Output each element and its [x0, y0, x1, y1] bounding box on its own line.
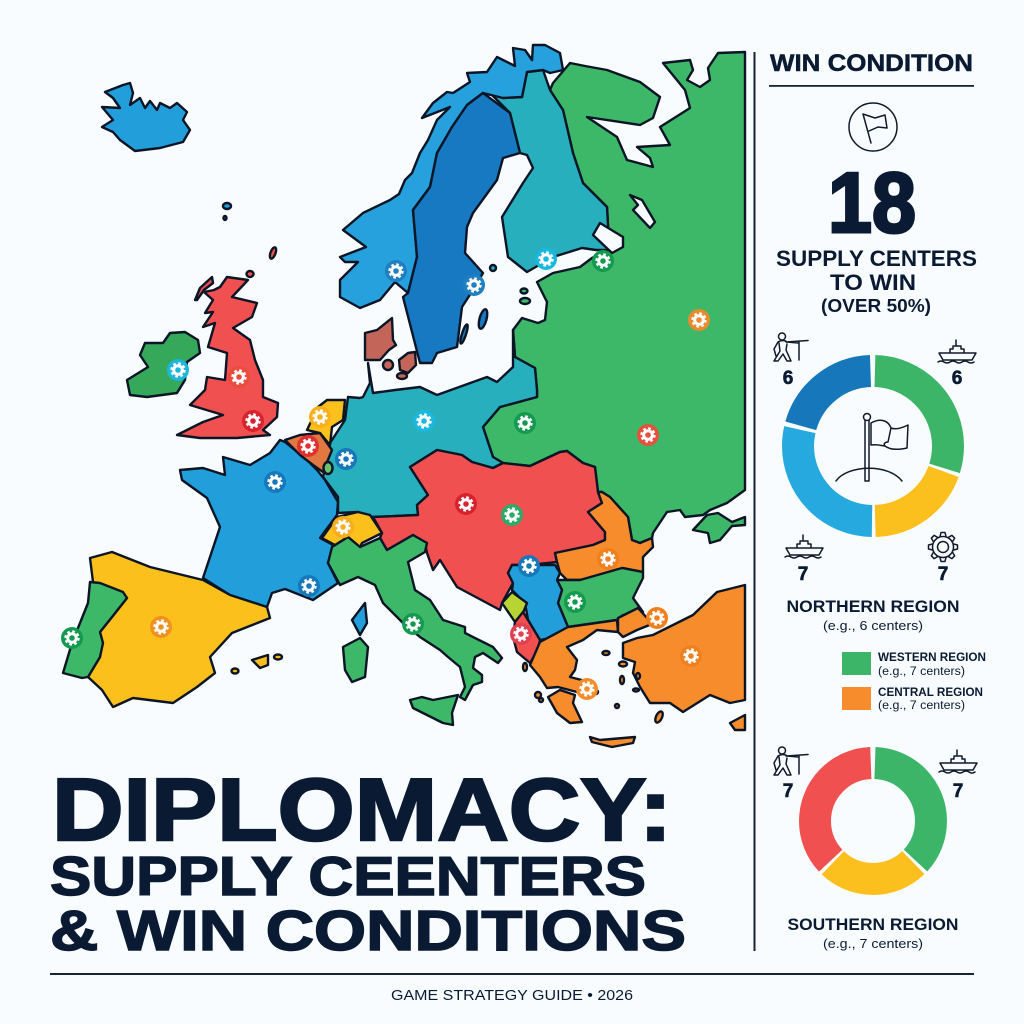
win condition text — [776, 246, 977, 316]
region: Luxembourg — [324, 462, 332, 474]
legend swatch: central — [842, 687, 871, 710]
region: Germany and Baltic coast — [323, 330, 537, 517]
legend text: western: (e.g., 7 centers) — [878, 666, 965, 678]
supply center marker: Finland — [535, 248, 557, 270]
region: European Turkey — [618, 608, 657, 637]
icon: flag in circle — [849, 103, 897, 151]
region: Montenegro — [502, 592, 527, 622]
supply center marker: Portugal — [61, 627, 83, 649]
donut values: southern region: 7 — [953, 781, 963, 802]
region: Aegean islands — [523, 651, 664, 724]
footer text: GAME STRATEGY GUIDE • 2026 — [391, 988, 633, 1004]
supply center marker: Warsaw — [514, 412, 536, 434]
legend text: western: WESTERN REGION — [878, 652, 986, 664]
supply center marker: Ireland — [167, 359, 189, 381]
region: Norway — [340, 45, 563, 308]
footer rule — [50, 973, 974, 975]
supply center marker: Spain — [150, 616, 172, 638]
win condition text: (OVER 50%) — [821, 296, 931, 316]
title: SUPPLY CEENTERS — [50, 845, 646, 907]
donut values: southern region: 7 — [783, 781, 793, 802]
southern region label — [788, 915, 958, 951]
region: France — [180, 440, 338, 607]
supply center marker: Sweden — [463, 274, 485, 296]
region: Crete — [590, 737, 635, 747]
region: Spain — [88, 552, 270, 707]
region: Sweden — [403, 93, 520, 363]
supply center marker: Serbia — [518, 555, 540, 577]
northern region label: (e.g., 6 centers) — [823, 618, 923, 633]
region: Iceland — [102, 83, 190, 151]
big number 18: 18 — [828, 156, 916, 251]
southern region label: SOUTHERN REGION — [788, 915, 958, 934]
donut values: northern region: 6 — [952, 368, 962, 389]
northern region label — [786, 597, 960, 633]
donut chart: northern region — [798, 371, 948, 521]
supply center marker: St Petersburg — [592, 250, 614, 272]
region: Ireland — [127, 332, 200, 397]
legend — [842, 652, 986, 712]
title — [50, 760, 686, 963]
legend text: central: CENTRAL REGION — [878, 687, 983, 699]
supply center marker: Moscow south — [637, 424, 659, 446]
region: Peloponnese — [548, 690, 582, 723]
region: Greece — [530, 620, 618, 693]
supply center marker: Holland — [309, 406, 331, 428]
donut values: northern region: 6 — [783, 368, 793, 389]
supply center marker: Berlin — [413, 410, 435, 432]
supply center marker: Liverpool — [228, 366, 250, 388]
region: Turkey — [623, 585, 745, 712]
supply center marker: Ruhr — [335, 448, 357, 470]
supply center marker: Paris — [264, 471, 286, 493]
icon: soldier top left — [774, 333, 808, 361]
legend text: western — [878, 652, 986, 678]
supply center marker: Turkey — [680, 645, 702, 667]
icon: soldier lower left — [774, 747, 808, 775]
region: Portugal — [63, 582, 127, 678]
region: Serbia — [508, 565, 568, 640]
region: Scottish islands — [195, 247, 277, 300]
supply center marker: Moscow — [688, 309, 710, 331]
region: Balearic islands — [232, 654, 282, 674]
region: Albania — [513, 612, 540, 663]
supply center marker: Rome — [402, 613, 424, 635]
donut values: northern region — [783, 368, 962, 585]
northern region label: NORTHERN REGION — [786, 597, 960, 616]
donut values: northern region: 7 — [798, 564, 808, 585]
donut values: northern region: 7 — [938, 564, 948, 585]
region: Faroe and Shetland islets — [223, 203, 231, 220]
icon: ship top right — [938, 340, 976, 363]
donut values: southern region — [783, 781, 963, 802]
region: Cyprus — [730, 715, 745, 730]
region: Lake Onega — [630, 195, 655, 228]
title: & WIN CONDITIONS — [50, 899, 686, 963]
region: Sicily — [410, 695, 458, 725]
supply center marker: Belgium — [297, 435, 319, 457]
region: Austria-Hungary — [373, 450, 605, 610]
region: Sardinia — [343, 638, 368, 682]
legend text: central — [878, 687, 983, 712]
icon: ship bottom left — [785, 535, 823, 558]
region: Romania — [555, 492, 653, 580]
region: Crimea — [693, 513, 745, 543]
icon: gear — [928, 532, 958, 562]
donut chart: southern region — [815, 763, 931, 879]
legend text: central: (e.g., 7 centers) — [878, 700, 965, 712]
supply center marker: Constantinople — [646, 607, 668, 629]
supply center marker: Albania — [510, 623, 532, 645]
supply center marker: Bulgaria — [564, 591, 586, 613]
title: DIPLOMACY: — [52, 760, 672, 859]
region: Bulgaria — [557, 568, 643, 627]
sidebar heading: WIN CONDITION — [770, 50, 973, 77]
region: Russia — [483, 52, 745, 543]
win condition text: TO WIN — [830, 270, 916, 295]
southern region label: (e.g., 7 centers) — [823, 936, 923, 951]
region: Finland — [487, 70, 608, 272]
supply center marker: Romania — [597, 548, 619, 570]
region: Switzerland — [322, 512, 382, 547]
region: Netherlands — [307, 400, 345, 445]
region: Corsica — [352, 603, 367, 635]
supply center marker: Greece — [576, 678, 598, 700]
supply center marker: London — [242, 410, 264, 432]
region: Italy — [328, 535, 502, 700]
region: Great Britain — [177, 277, 278, 438]
supply center marker: Norway — [385, 260, 407, 282]
supply center marker: Budapest — [501, 504, 523, 526]
legend swatch: western — [842, 652, 871, 675]
divider between map and sidebar — [754, 52, 756, 951]
supply center marker: Vienna — [455, 493, 477, 515]
supply center marker: Switzerland — [332, 516, 354, 538]
win condition text: SUPPLY CENTERS — [776, 246, 977, 271]
region: Lake Ladoga — [593, 223, 623, 253]
region: Denmark — [365, 318, 416, 379]
region: Baltic islands — [459, 265, 530, 344]
icon: flag on hill — [836, 414, 908, 481]
supply center marker: Marseilles — [298, 575, 320, 597]
region: Belgium — [285, 433, 332, 472]
icon: ship lower right — [939, 750, 977, 773]
map of Europe — [61, 45, 745, 747]
